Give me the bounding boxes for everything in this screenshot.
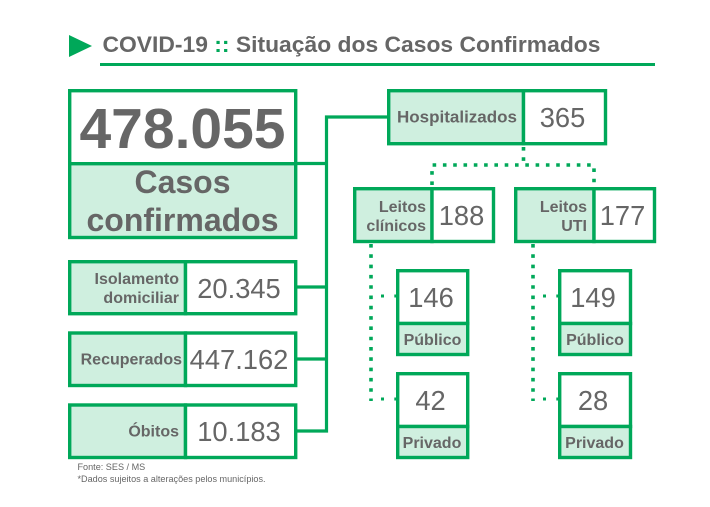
panel: leitos UTI [516, 189, 654, 242]
panel: hospitalizados [389, 91, 606, 144]
panel: recuperados [70, 333, 296, 386]
heading text: COVID-19 :: Situação dos Casos Confirmados [102, 32, 600, 57]
panel: clínicos público [398, 271, 468, 354]
panel: UTI privado: 28 [578, 385, 608, 416]
panel: óbitos [70, 405, 296, 458]
panel: leitos UTI: 177 [600, 200, 645, 231]
connector: dotted leitos UTI to público and privado [533, 244, 558, 401]
panel: UTI público [560, 271, 630, 354]
panel: UTI público: 149 [570, 282, 616, 313]
panel: clínicos privado: 42 [415, 385, 446, 416]
panel: leitos clínicos: 188 [439, 200, 484, 231]
panel: casos confirmados [70, 91, 296, 238]
panel: leitos clínicos: Leitos [379, 199, 426, 216]
icon: green triangle [69, 35, 92, 57]
panel: clínicos privado [398, 374, 468, 458]
panel: UTI privado [560, 374, 630, 458]
panel: isolamento domiciliar [70, 262, 296, 314]
connector: left boxes to hospitalizados [297, 117, 388, 431]
panel: leitos clínicos: clínicos [366, 218, 426, 235]
panel: recuperados: Recuperados [81, 352, 182, 368]
source note: *Dados sujeitos a alterações pelos municípios. [78, 474, 266, 484]
panel: clínicos privado: Privado [403, 435, 462, 452]
panel: leitos UTI: Leitos [540, 199, 587, 216]
panel: clínicos público: 146 [408, 282, 454, 313]
panel: isolamento domiciliar: 20.345 [197, 273, 281, 304]
panel: casos confirmados: confirmados [86, 202, 279, 238]
connector: dotted hospitalizados to leitos [432, 147, 594, 185]
source note: Fonte: SES / MS [78, 462, 145, 472]
connector: dotted leitos clínicos to público and privado [371, 244, 396, 401]
source note [78, 462, 266, 484]
panel: clínicos público: Público [404, 332, 462, 349]
panel: UTI público: Público [566, 332, 624, 349]
total number: 478.055 [79, 97, 286, 161]
panel: óbitos: Óbitos [128, 422, 179, 440]
title [69, 32, 655, 66]
panel: leitos clínicos [355, 189, 494, 242]
title underline [100, 63, 655, 66]
panel: óbitos: 10.183 [197, 416, 281, 447]
panel: isolamento domiciliar: Isolamento [95, 271, 179, 288]
panel: UTI privado: Privado [565, 435, 624, 452]
panel: recuperados: 447.162 [190, 344, 288, 375]
panel: hospitalizados: Hospitalizados [397, 108, 517, 126]
panel: isolamento domiciliar: domiciliar [103, 290, 179, 307]
label: Casos [134, 164, 231, 200]
panel: hospitalizados: 365 [540, 102, 585, 133]
panel: leitos UTI: UTI [561, 218, 587, 235]
